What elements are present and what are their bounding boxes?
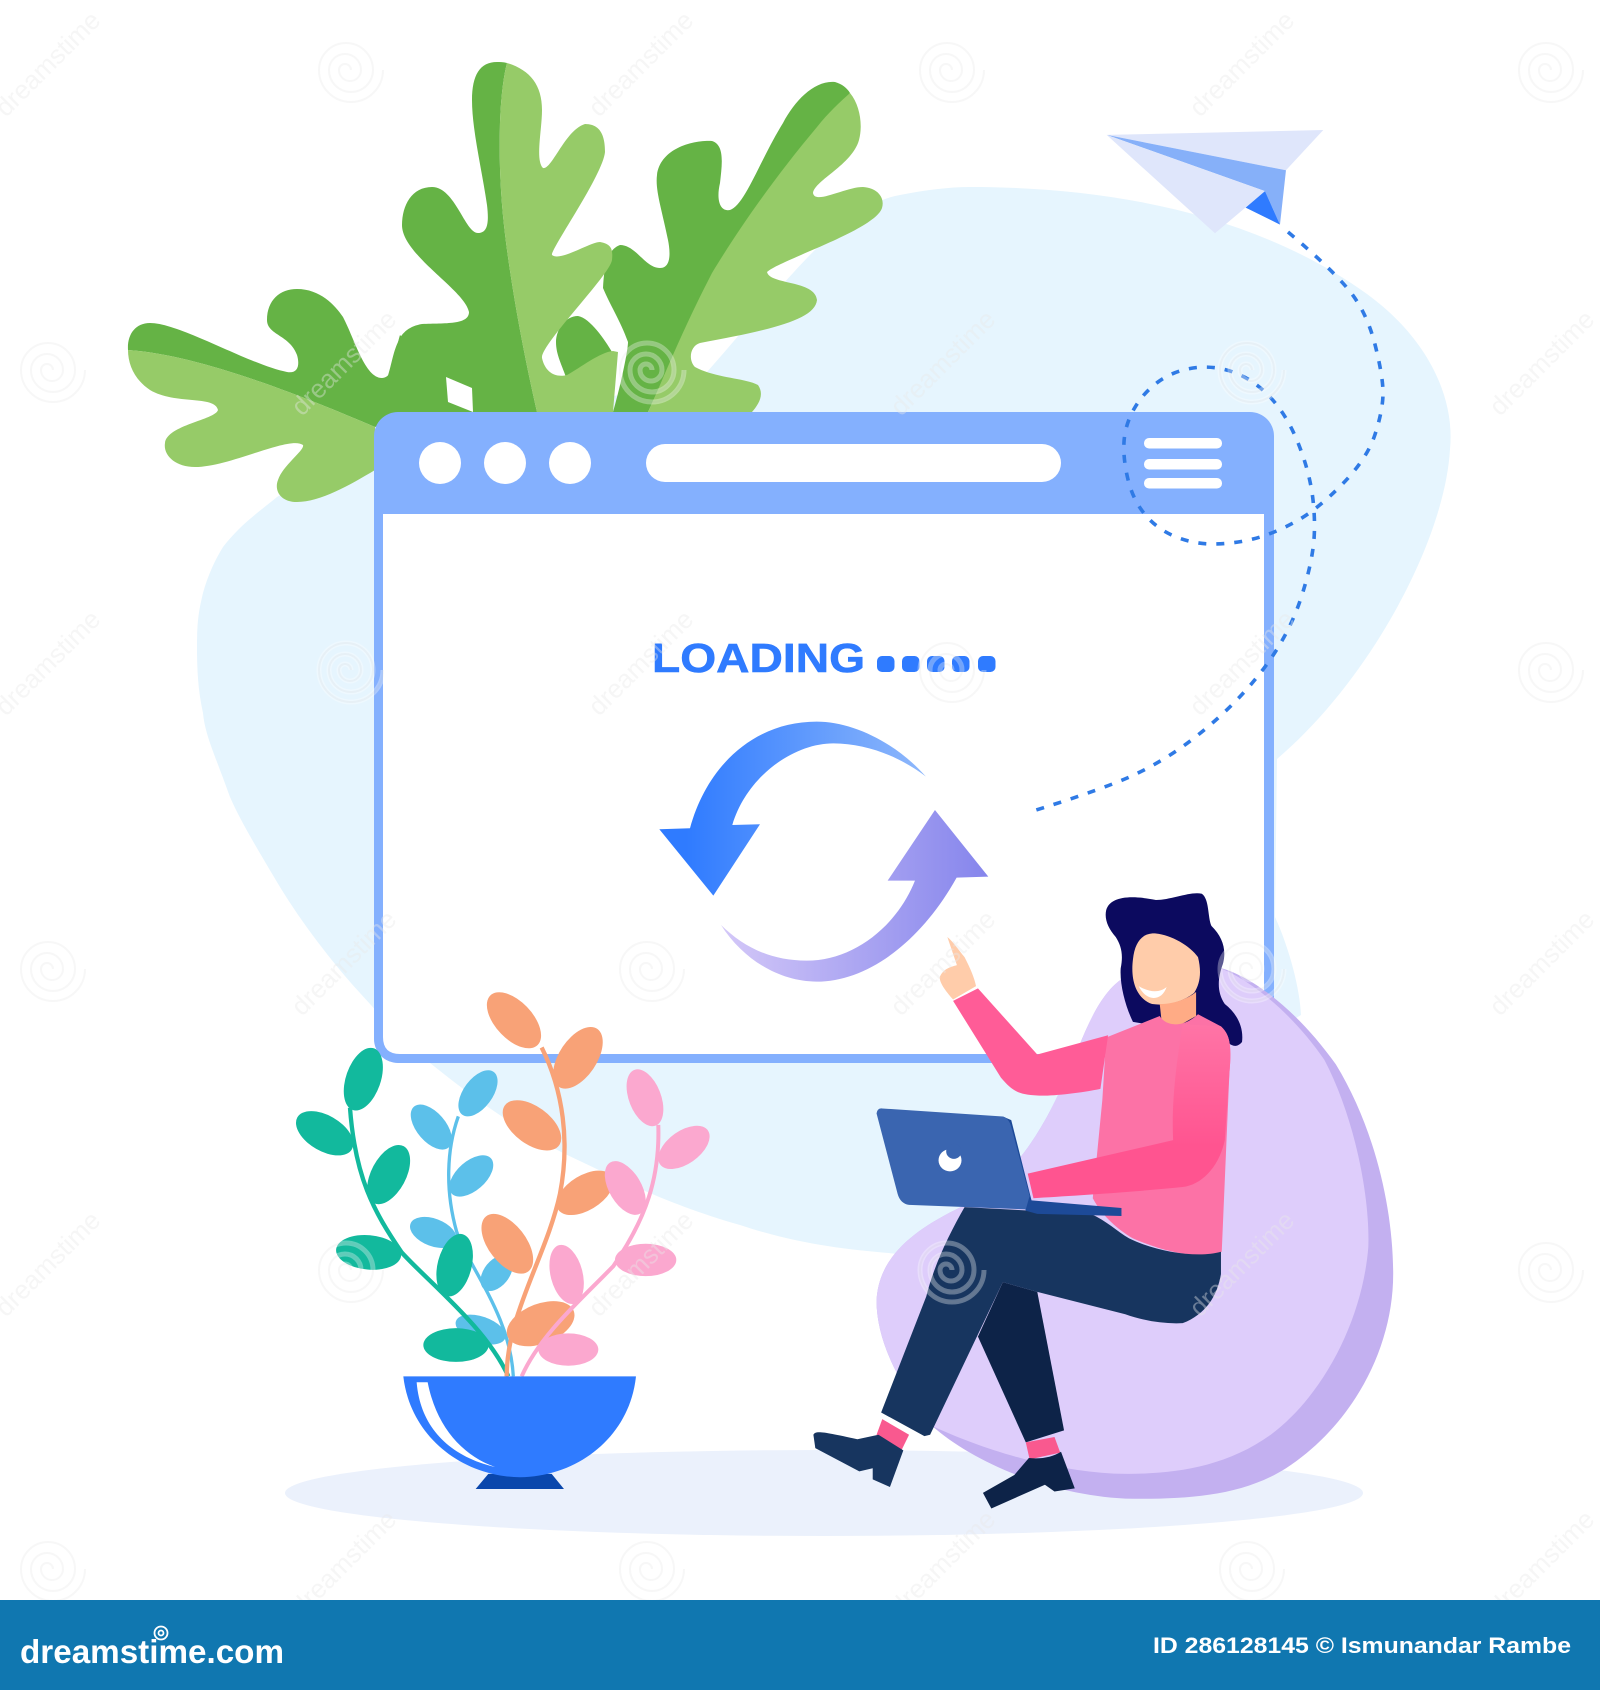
- hair: [1106, 893, 1242, 1046]
- watermark text: dreamstime: [285, 304, 402, 421]
- watermark text: dreamstime: [884, 904, 1001, 1021]
- watermark text: dreamstime: [582, 1205, 699, 1322]
- watermark text: dreamstime: [582, 604, 699, 721]
- leaves: large green plant behind browser: [128, 62, 883, 502]
- right leaf: [603, 82, 883, 412]
- beanbag: [877, 967, 1393, 1499]
- footer bar: [0, 1600, 1600, 1690]
- purple arrow: [721, 810, 988, 982]
- loading text: LOADING: [652, 635, 865, 681]
- watermark text: dreamstime: [884, 1504, 1001, 1621]
- pink branch: [522, 1064, 717, 1376]
- ground shadow: [285, 1450, 1363, 1536]
- watermark text: dreamstime: [1183, 5, 1300, 122]
- icon: paper plane: [1107, 130, 1323, 233]
- image credit: ID 286128145 © Ismunandar Rambe: [1153, 1633, 1571, 1658]
- sweater body: [1093, 1014, 1230, 1255]
- window content area: [383, 514, 1264, 1054]
- icon: refresh arrows: [659, 722, 988, 982]
- watermark text: dreamstime: [1483, 1504, 1600, 1621]
- raised arm: [953, 988, 1108, 1096]
- smile: [1139, 986, 1167, 998]
- window control dots: [419, 442, 591, 484]
- blue arrow: [659, 722, 926, 896]
- watermark text: dreamstime: [582, 5, 699, 122]
- watermark text: dreamstime: [285, 904, 402, 1021]
- pot foot: [476, 1474, 564, 1489]
- background blob: [197, 187, 1451, 1254]
- logo spiral icon: [154, 1626, 168, 1640]
- watermark text: dreamstime: [285, 1504, 402, 1621]
- laptop: [877, 1108, 1121, 1216]
- window frame: [374, 412, 1274, 1063]
- loading label: [652, 635, 996, 681]
- centre leaf: [385, 62, 618, 412]
- socks: [877, 1419, 1060, 1459]
- neck: [1160, 992, 1196, 1027]
- teal branch: [289, 1042, 508, 1376]
- back leg: [978, 1282, 1064, 1442]
- address bar: [646, 444, 1061, 482]
- hand: [940, 937, 976, 1000]
- small inner lobe: [556, 316, 612, 380]
- browser window: [374, 412, 1274, 1063]
- menu icon: [1144, 438, 1222, 488]
- face: [1132, 933, 1200, 1005]
- watermark text: dreamstime: [1483, 304, 1600, 421]
- watermark text: dreamstime: [1183, 1205, 1300, 1322]
- blue branch: [403, 1063, 519, 1376]
- watermark text: dreamstime: [1183, 604, 1300, 721]
- woman on beanbag: [813, 893, 1393, 1508]
- pot bowl: [403, 1376, 636, 1477]
- lower arm: [1028, 1024, 1230, 1198]
- dashed flight path: [1033, 232, 1383, 811]
- orange branch: [471, 982, 621, 1376]
- pot highlight: [417, 1382, 495, 1467]
- footer logo: dreamstime.com: [20, 1633, 284, 1670]
- left leaf: [128, 289, 460, 502]
- watermark text: dreamstime: [884, 304, 1001, 421]
- potted plant: [289, 982, 717, 1489]
- watermark text: dreamstime: [1483, 904, 1600, 1021]
- front leg: [881, 1207, 1221, 1436]
- shoes: [813, 1432, 1075, 1508]
- progress dots: [877, 656, 996, 672]
